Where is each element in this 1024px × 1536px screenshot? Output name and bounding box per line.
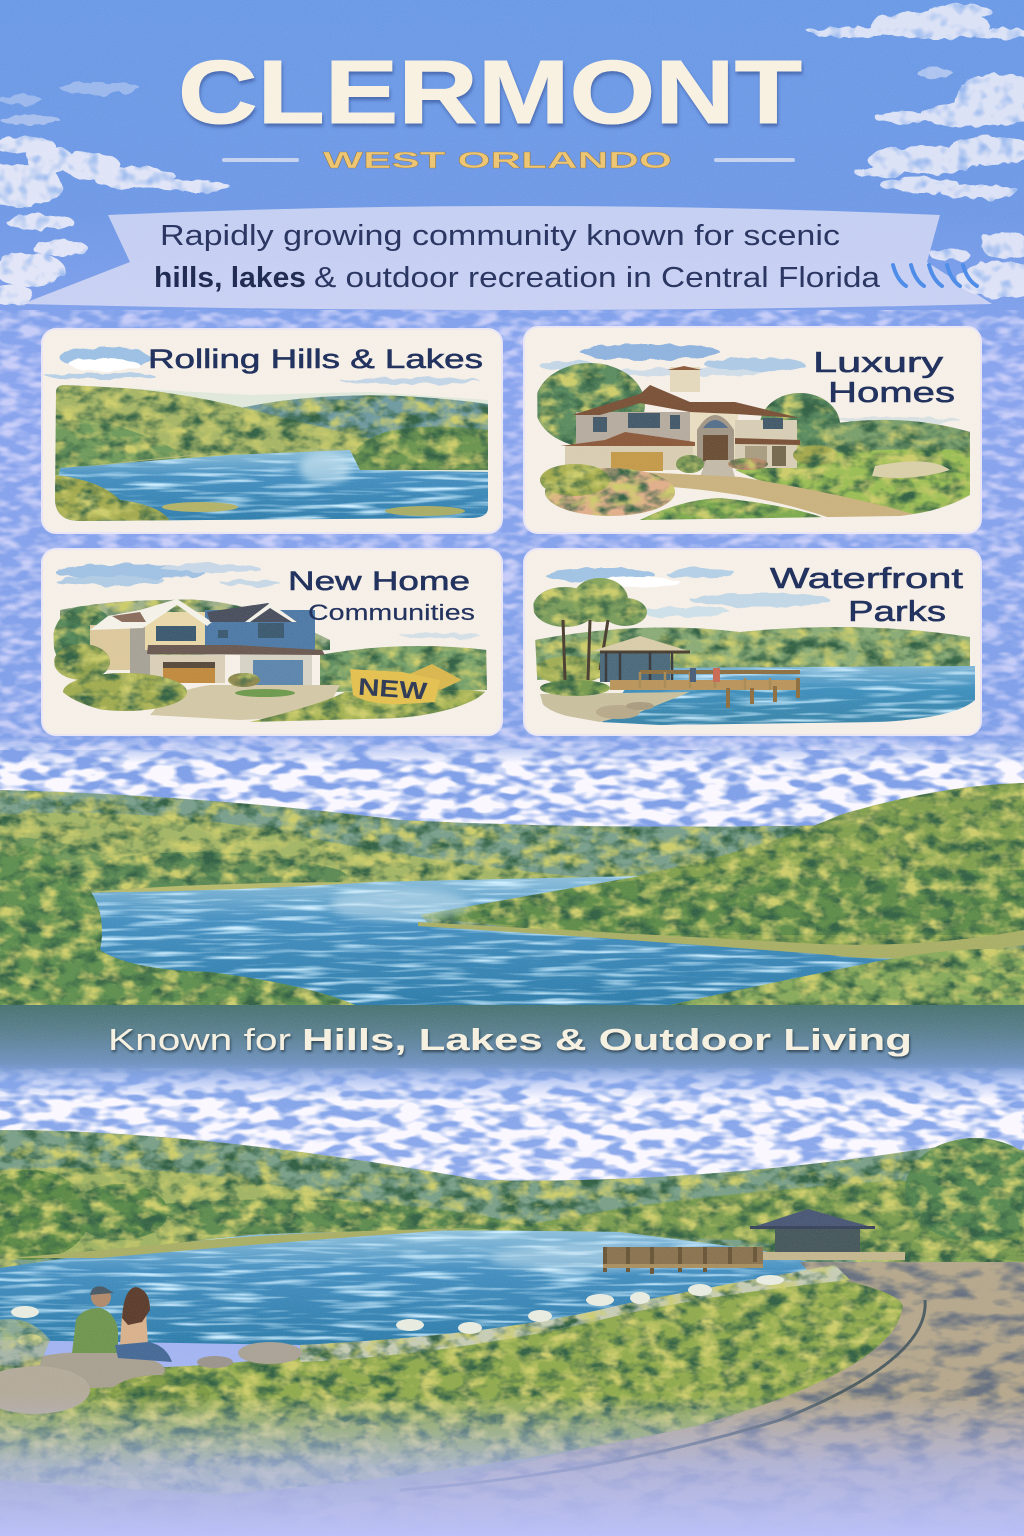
house (90, 599, 325, 691)
description text: & outdoor recreation in Central Florida (314, 262, 881, 294)
card title (288, 566, 475, 625)
pier and gazebo (603, 1209, 905, 1274)
clouds: page edges (0, 310, 1024, 750)
card title (770, 563, 963, 628)
icon: water waves (893, 265, 977, 286)
card title: New Home (288, 566, 470, 596)
card sky (540, 344, 960, 423)
card title: Parks (848, 596, 946, 628)
description text: hills, lakes (154, 262, 306, 294)
pavilion and dock (592, 636, 800, 708)
house (560, 366, 800, 477)
illustration: luxury house (535, 363, 970, 520)
banner: Known for: Hills, Lakes & Outdoor Living (302, 1022, 912, 1057)
card sky (545, 568, 830, 617)
clouds: band above first landscape (0, 738, 1024, 838)
banner: Known for (0, 1005, 1024, 1083)
clouds: upper left (0, 82, 230, 305)
panel: Waterfront Parks (524, 549, 981, 735)
path (200, 1262, 1024, 1536)
description text: Rapidly growing community known for scenic (160, 220, 840, 252)
sign: NEW (350, 664, 462, 705)
description text (154, 220, 881, 294)
bottom fade (0, 1395, 1024, 1536)
card title: Communities (308, 600, 475, 625)
illustration: waterfront park (533, 578, 975, 725)
panel: New Home Communities (42, 549, 502, 735)
illustration: new homes (53, 599, 487, 722)
subtitle: West Orlando (222, 147, 795, 173)
clouds: band above second landscape (0, 1068, 1024, 1193)
subtitle: West Orlando: WEST ORLANDO (323, 147, 672, 173)
shoreline rocks and flowers (0, 1265, 850, 1415)
card title: Waterfront (770, 563, 963, 595)
card title: Rolling Hills & Lakes (148, 344, 483, 374)
landscape: lake, pier and couple (0, 1130, 1024, 1536)
couple (72, 1286, 172, 1362)
subtitle ribbon (22, 206, 992, 310)
panel: Rolling Hills & Lakes (42, 329, 502, 533)
card title: Homes (828, 377, 955, 409)
banner: Known for: Known for (108, 1022, 291, 1057)
card sky (45, 347, 480, 384)
meadow (0, 1278, 903, 1495)
illustration: hills and lake (50, 380, 495, 525)
title: CLERMONT (178, 43, 802, 143)
card title: Luxury (813, 347, 944, 379)
sign: NEW: NEW (357, 674, 428, 705)
panel: Luxury Homes (524, 327, 981, 533)
card sky (55, 564, 480, 639)
ground under bottom fade (0, 1430, 1024, 1536)
landscape: hills and lake (0, 783, 1024, 1005)
card title (813, 347, 955, 409)
clouds: upper right (808, 3, 1024, 298)
